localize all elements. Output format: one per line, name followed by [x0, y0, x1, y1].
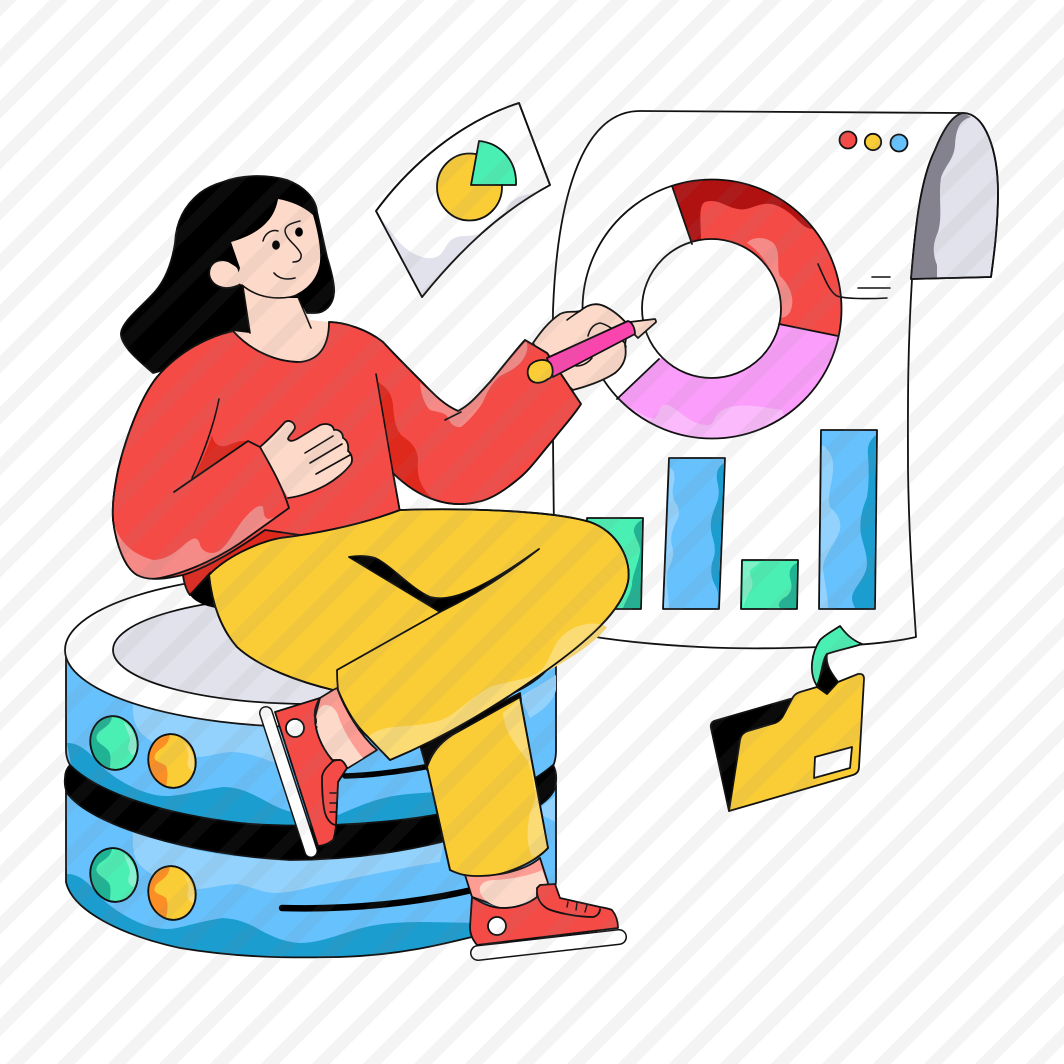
crease	[349, 549, 539, 612]
shirt fold lines	[192, 374, 461, 512]
hair	[121, 176, 334, 373]
slot line upper	[345, 765, 435, 776]
shirt	[113, 322, 581, 595]
panel: server database stack	[65, 573, 556, 957]
eyebrow and nose	[263, 221, 301, 262]
window dots	[840, 132, 908, 152]
lower leg pants	[427, 697, 548, 877]
donut segments	[619, 180, 841, 438]
smile	[274, 273, 295, 279]
folder label	[814, 747, 852, 778]
eyes	[272, 227, 303, 250]
upper leg outline	[209, 509, 629, 760]
neck	[233, 287, 329, 362]
paper sheet	[553, 111, 963, 648]
pen hand finger lines	[567, 311, 626, 366]
seat shadow under shirt	[190, 574, 216, 608]
pen	[528, 319, 656, 383]
paper roll curl	[911, 113, 998, 279]
hair lock over ear	[215, 242, 238, 268]
lower leg inner shadow	[420, 693, 521, 770]
upper wave right highlight	[520, 675, 556, 718]
shirt shadow right side	[378, 382, 432, 498]
shirt shadow waist	[183, 530, 300, 595]
shirt shadow under chest arm	[193, 435, 248, 478]
bar 4	[819, 430, 877, 609]
pen hand	[533, 304, 628, 390]
slot line lower	[282, 888, 480, 908]
folder front	[729, 674, 864, 811]
top disk	[65, 573, 555, 727]
bar 3	[741, 560, 798, 609]
knee highlight	[368, 624, 607, 760]
upper cylinder body	[66, 650, 556, 840]
bar chart	[587, 430, 877, 609]
chin and neck lines	[242, 285, 311, 333]
lower wave shade	[67, 874, 480, 957]
lower cylinder outline	[66, 785, 556, 957]
upper wave shade	[67, 743, 470, 832]
indicator lights lower	[85, 844, 201, 924]
panel: woman figure	[113, 176, 656, 953]
ear	[209, 260, 243, 288]
upper shoe sole	[266, 713, 311, 851]
top disk recess	[113, 596, 507, 704]
paper curl out of folder	[812, 626, 862, 694]
indicator lights upper	[85, 712, 201, 792]
lower leg outline	[427, 697, 548, 877]
black band	[65, 765, 556, 860]
left sleeve cuff outline	[113, 331, 289, 579]
lower cylinder body	[66, 785, 556, 957]
finger lines	[305, 436, 350, 474]
bar 1	[587, 518, 643, 609]
lower right highlight	[535, 795, 556, 822]
left sleeve highlight	[114, 506, 289, 579]
bar 2	[663, 458, 725, 609]
page shadow	[377, 186, 549, 296]
donut chart	[582, 178, 891, 440]
panel: folder	[711, 626, 864, 811]
lower shoe sole	[478, 937, 619, 953]
right sleeve highlight	[420, 341, 527, 427]
ankle upper foot	[315, 688, 377, 768]
chest hand	[260, 421, 352, 498]
sleeve outline right	[329, 322, 581, 504]
pie chart	[437, 141, 516, 220]
lower leg highlight	[503, 699, 547, 857]
upper leg pants	[209, 509, 629, 760]
folder back	[711, 690, 830, 811]
lower shoe	[470, 884, 618, 945]
face	[231, 199, 320, 298]
panel: report paper with charts	[553, 111, 998, 648]
upper wave highlight	[133, 700, 340, 763]
panel: small pie chart page	[376, 103, 550, 297]
page sheet	[376, 103, 550, 297]
ankle lower foot	[465, 858, 548, 908]
lower wave highlight	[133, 830, 445, 893]
page outline	[376, 103, 550, 297]
upper shoe	[275, 698, 347, 846]
